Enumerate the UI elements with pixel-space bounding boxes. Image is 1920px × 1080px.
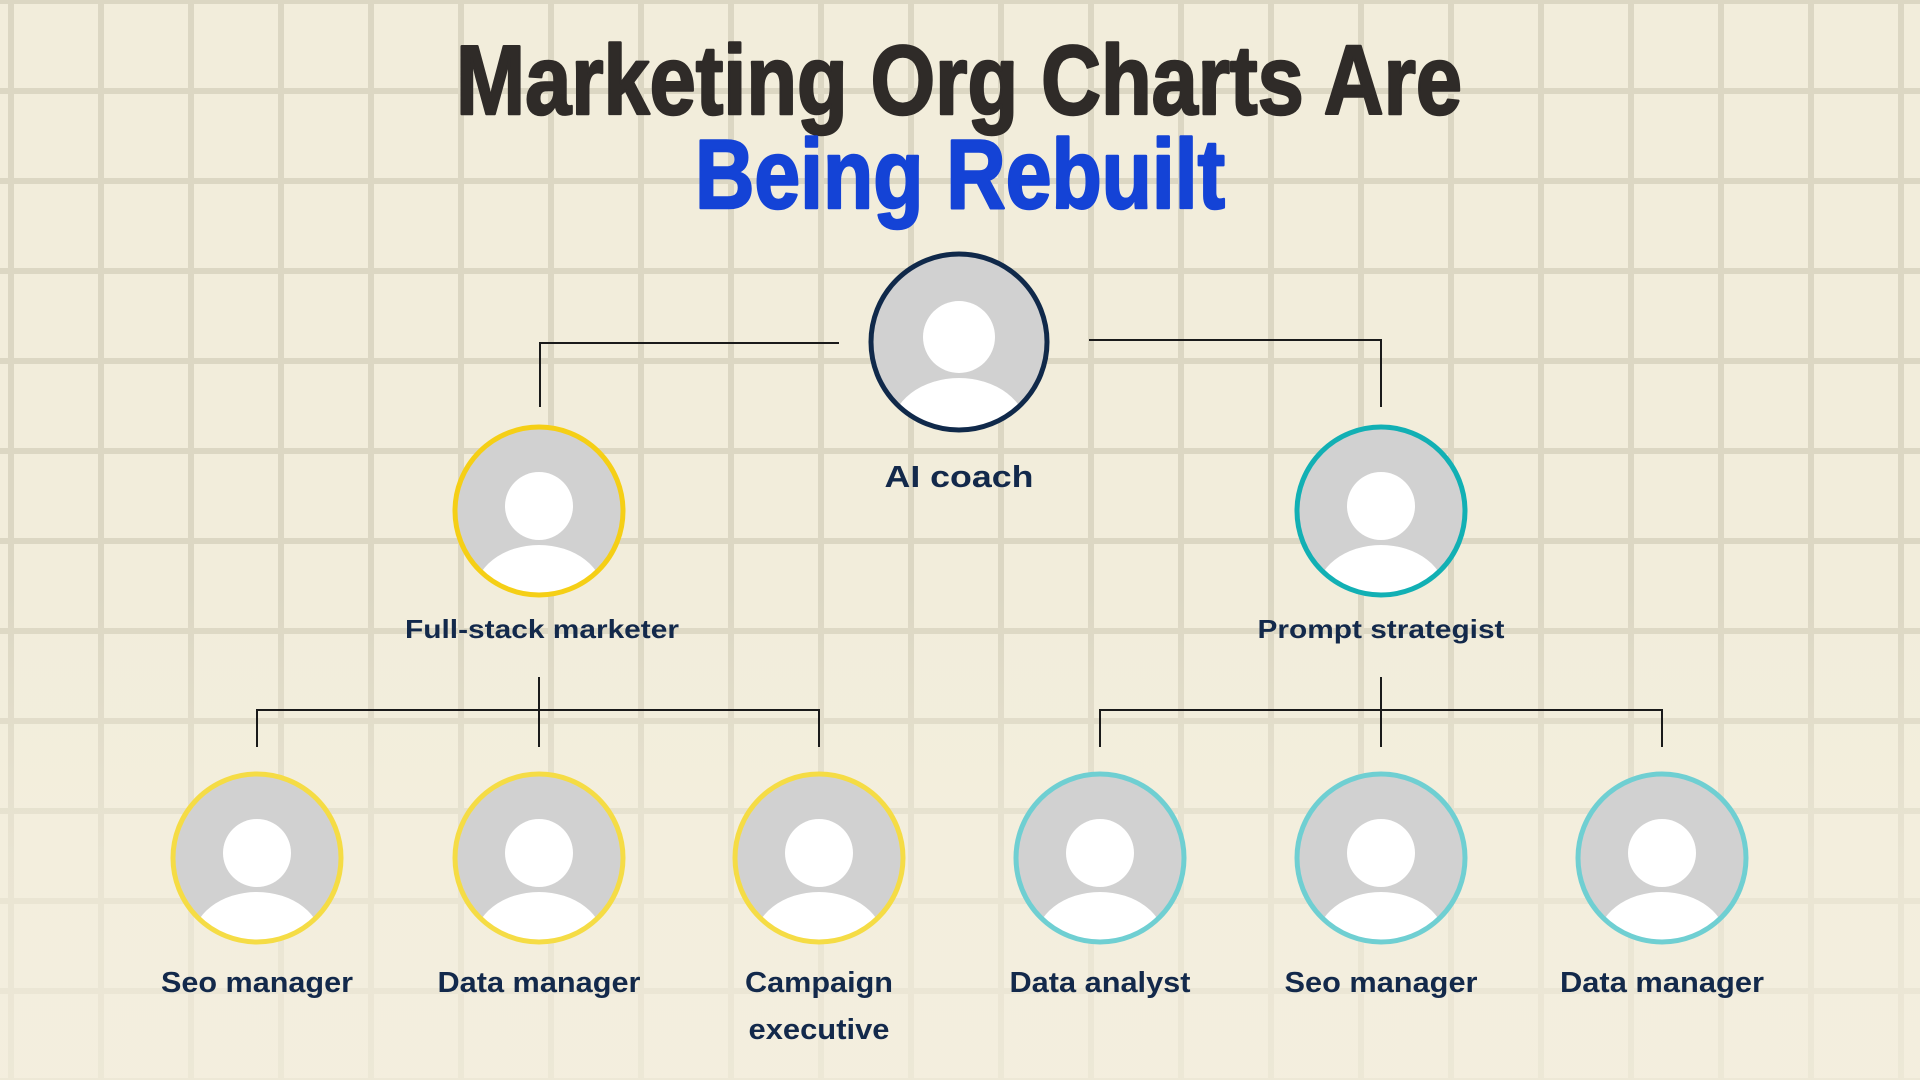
connectors: top level bbox=[540, 340, 1381, 407]
node: AI coach bbox=[871, 254, 1047, 494]
node: Data manager (right) bbox=[1560, 774, 1764, 999]
node: Seo manager (right) bbox=[1284, 774, 1478, 999]
title: Being Rebuilt bbox=[695, 119, 1225, 229]
node: Campaign executive: executive bbox=[748, 1014, 890, 1046]
connectors: right branch bbox=[1100, 677, 1662, 747]
node: Campaign executive bbox=[735, 774, 903, 1046]
node: Data manager (left) bbox=[438, 774, 640, 999]
title bbox=[456, 25, 1462, 229]
node: Prompt strategist bbox=[1258, 427, 1505, 645]
node: Data analyst: Data analyst bbox=[1010, 967, 1191, 999]
node: Data analyst bbox=[1010, 774, 1191, 999]
node: Prompt strategist: Prompt strategist bbox=[1258, 614, 1505, 644]
title: Marketing Org Charts Are bbox=[456, 25, 1462, 135]
node: Data manager (right): Data manager bbox=[1560, 967, 1764, 999]
node: Data manager (left): Data manager bbox=[438, 967, 640, 999]
node: Full-stack marketer: Full-stack marketer bbox=[405, 614, 679, 644]
node: Seo manager (left): Seo manager bbox=[161, 967, 353, 999]
node: Full-stack marketer bbox=[405, 427, 679, 645]
node: Campaign executive: Campaign bbox=[745, 967, 893, 999]
connectors: left branch bbox=[257, 677, 819, 747]
node: Seo manager (right): Seo manager bbox=[1284, 967, 1478, 999]
node: AI coach: AI coach bbox=[884, 459, 1034, 494]
node: Seo manager (left) bbox=[161, 774, 353, 999]
